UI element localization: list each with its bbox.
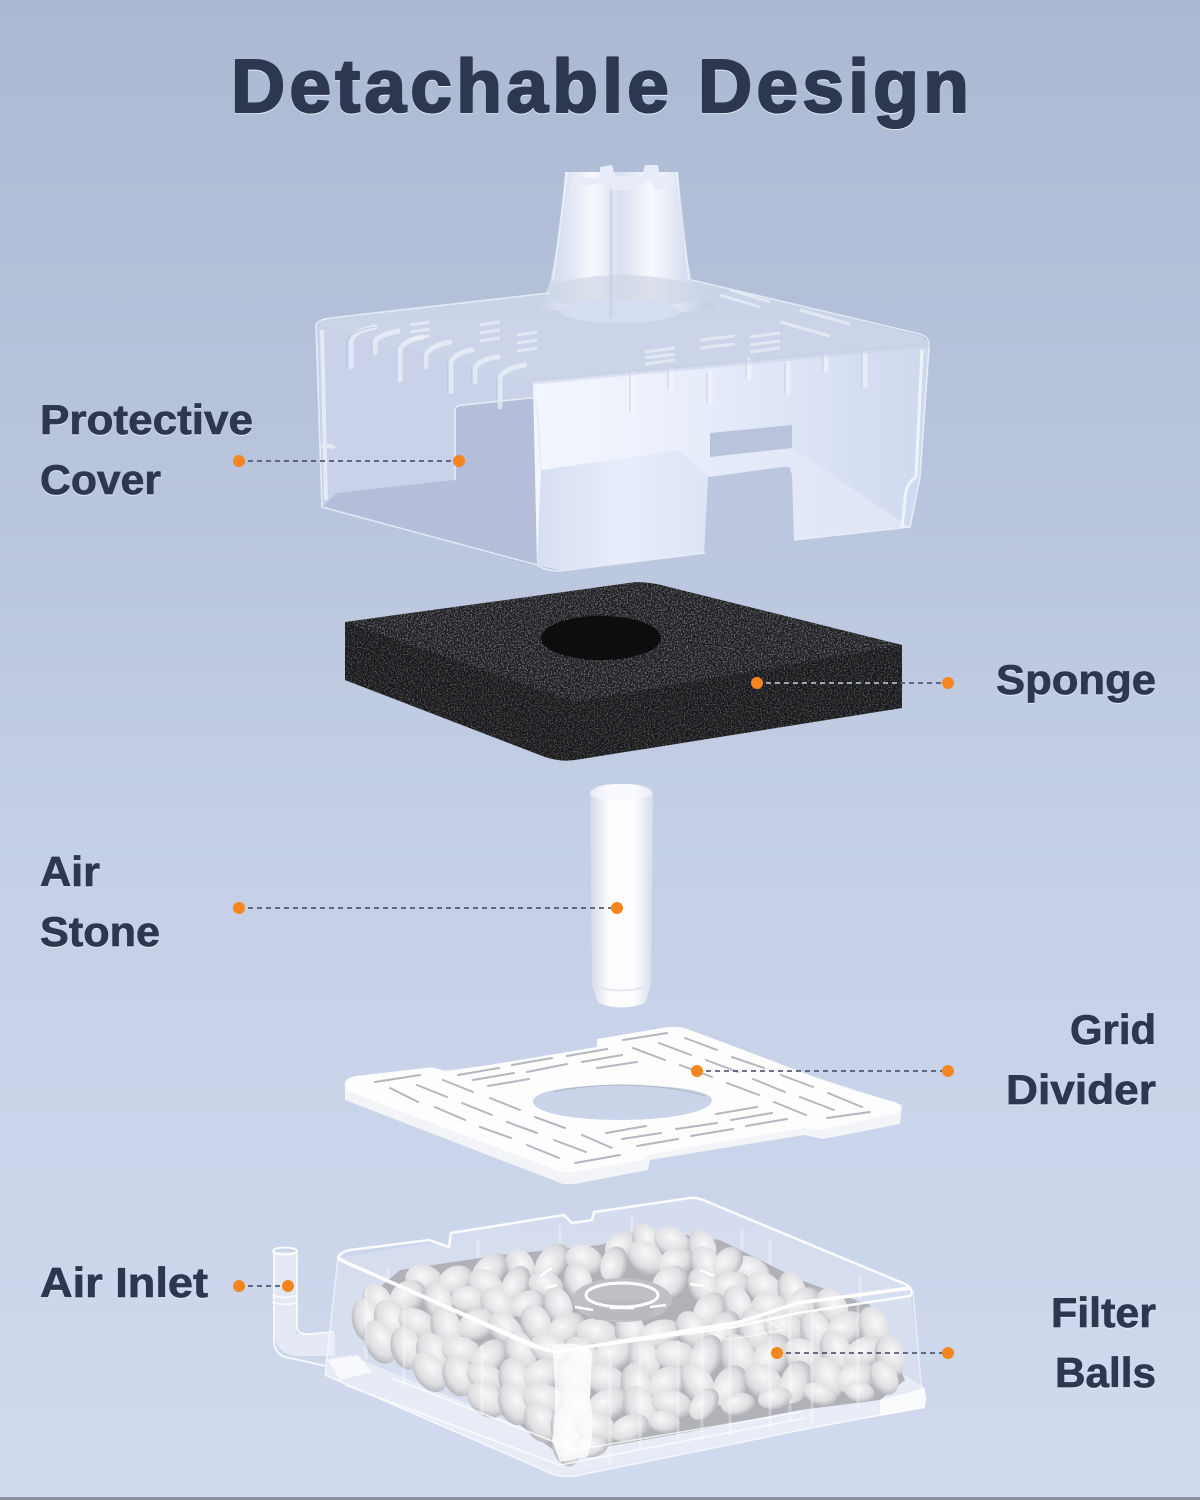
callout: Sponge — [751, 677, 954, 689]
cover tabs — [347, 327, 865, 412]
cover right wall — [533, 345, 930, 570]
grid hole inner wall — [553, 1085, 705, 1096]
cover notch — [705, 467, 794, 553]
label: Protective Cover — [40, 396, 253, 503]
filter stones — [348, 1219, 910, 1470]
label: Protective Cover: Cover — [40, 456, 161, 503]
tray front ribs — [366, 1290, 858, 1465]
sponge hole — [541, 616, 661, 660]
label: Air Stone: Air — [40, 848, 100, 895]
callout: Protective Cover — [233, 455, 465, 467]
cone crown — [570, 165, 678, 190]
cover top slats — [410, 290, 850, 364]
grid slots — [375, 1033, 870, 1163]
filter balls tray illustration — [272, 1198, 925, 1476]
label: Air Stone: Stone — [40, 908, 160, 955]
label: Filter Balls: Balls — [1055, 1349, 1156, 1396]
label: Sponge: Sponge — [996, 656, 1156, 703]
callout: Air Stone — [233, 902, 623, 914]
sponge illustration — [345, 582, 902, 761]
tray back walls — [325, 1198, 923, 1475]
grid thickness — [345, 1040, 902, 1184]
tray inner ribs back — [388, 1215, 860, 1300]
cover edges — [316, 280, 929, 571]
callout: Air Inlet — [233, 1280, 294, 1292]
grid top face — [345, 1027, 900, 1172]
cover top plate — [316, 280, 930, 382]
label: Air Stone — [40, 848, 160, 955]
label: Grid Divider — [1006, 1006, 1156, 1113]
tray base edge — [325, 1375, 925, 1476]
callout: Grid Divider — [691, 1065, 954, 1077]
cover side window — [710, 425, 792, 457]
label: Filter Balls: Filter — [1051, 1289, 1156, 1336]
label: Grid Divider: Grid — [1070, 1006, 1156, 1053]
air inlet tube — [272, 1248, 335, 1366]
label: Filter Balls — [1051, 1289, 1156, 1396]
sponge body — [345, 582, 902, 761]
grid divider illustration — [345, 1027, 902, 1184]
label: Protective Cover: Protective — [40, 396, 253, 443]
air stone illustration — [590, 784, 653, 1008]
cover left lower see-through — [322, 398, 537, 567]
tray front corner highlight — [328, 1344, 925, 1462]
protective cover illustration — [316, 165, 930, 571]
callout: Filter Balls — [771, 1347, 954, 1359]
title: Detachable Design — [231, 44, 969, 128]
cover left wall — [316, 325, 535, 507]
cover cone — [532, 172, 716, 316]
label: Air Inlet: Air Inlet — [40, 1259, 208, 1306]
front corner lower face — [537, 450, 708, 570]
tray rim — [338, 1198, 912, 1352]
tray base plate — [325, 1355, 925, 1476]
label: Grid Divider: Divider — [1006, 1066, 1156, 1113]
tray centre ring — [540, 1268, 714, 1322]
